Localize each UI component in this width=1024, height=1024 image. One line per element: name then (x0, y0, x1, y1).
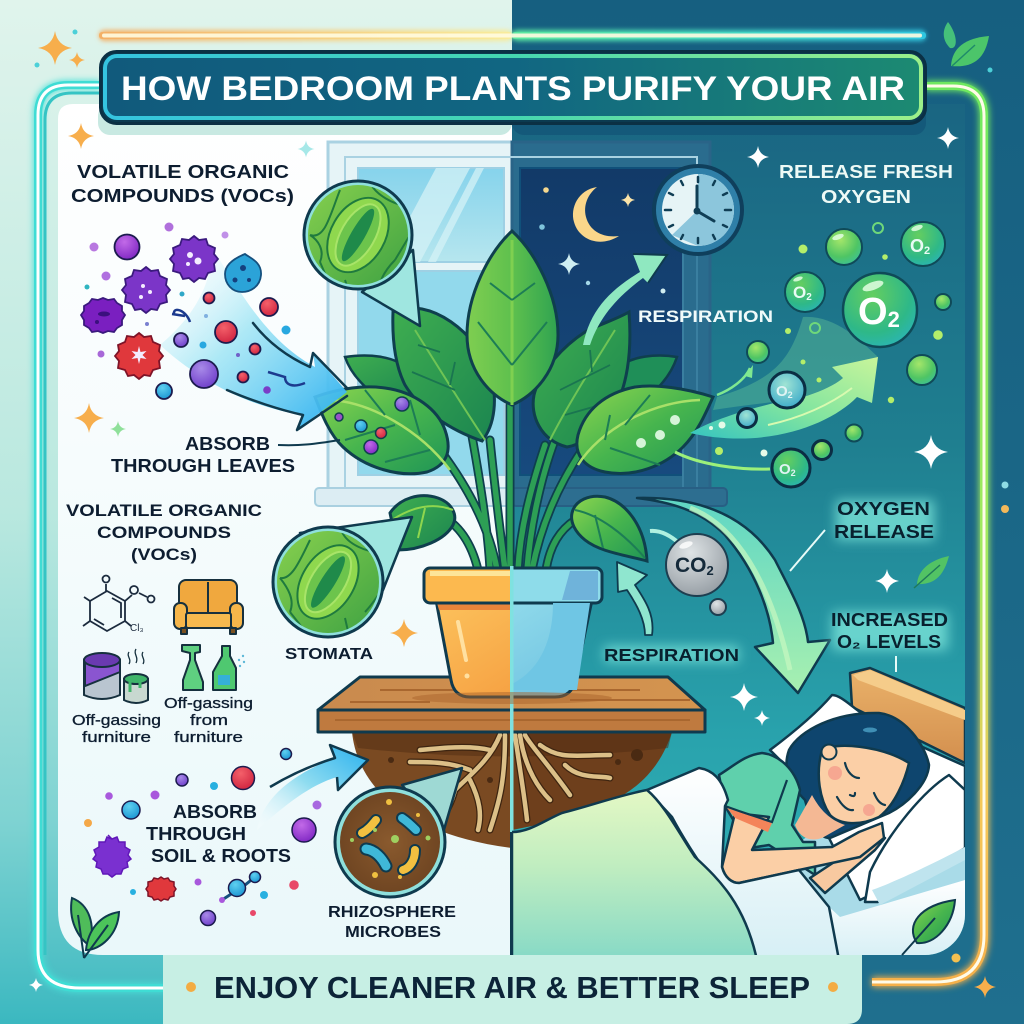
label: oxygen release: RELEASE (834, 522, 934, 542)
window frame: night (512, 142, 710, 490)
label: stomata: STOMATA (285, 646, 374, 663)
O2 bubbles: O (793, 283, 806, 302)
label: off-gassing from furniture right (164, 696, 253, 746)
sparkles near bed (730, 683, 770, 726)
icon: leaf bottom right (902, 900, 955, 955)
table front (318, 710, 705, 732)
pot: day half (422, 566, 510, 698)
arrow to clock (583, 254, 667, 345)
icon: cleaning bottles (182, 645, 245, 690)
panel: day side (58, 104, 512, 955)
O2 bubbles (715, 222, 951, 487)
icon: leaf near increased levels (914, 556, 949, 588)
face (795, 728, 909, 839)
inner frame (345, 157, 697, 488)
label: off-gassing from furniture right: Off-gassing (164, 696, 253, 712)
icon: leaves bottom left (71, 898, 119, 958)
label: off-gassing from furniture right: from (190, 713, 228, 729)
VOC blob: purple (170, 236, 218, 282)
panel: night side (512, 104, 965, 955)
back leaf left (345, 356, 426, 400)
hair back (786, 713, 929, 838)
label: absorb through leaves: THROUGH LEAVES (111, 456, 295, 476)
label: rhizosphere microbes: RHIZOSPHERE (328, 904, 456, 921)
window sill (315, 488, 727, 506)
label: release fresh oxygen: RELEASE FRESH (779, 162, 953, 182)
lower VOC particles (84, 748, 322, 926)
soil ball (352, 732, 672, 848)
icon: sofa (174, 580, 243, 634)
O2 rising arrow (675, 317, 878, 469)
CO2 bubble (666, 534, 728, 596)
icon: clock (652, 164, 744, 256)
heading: VOCs upper: COMPOUNDS (VOCs) (71, 186, 294, 206)
VOC blob: red (115, 333, 163, 379)
label: off-gassing from furniture right: furniture (174, 730, 243, 746)
large O2 bubble (843, 273, 917, 347)
big curved arrow down to sleeper (637, 498, 830, 693)
lower right leaf (572, 496, 647, 561)
icon: crescent moon (573, 187, 619, 242)
heading: VOCs upper: VOLATILE ORGANIC (77, 162, 289, 182)
label: increased O2 levels (831, 610, 948, 652)
green blanket (512, 790, 757, 960)
icon: leaves top right (944, 22, 989, 66)
stomata callout top (300, 180, 420, 326)
center divider line (510, 566, 514, 834)
divider under table (510, 832, 513, 955)
pot (424, 568, 602, 697)
upper right leaf (533, 312, 630, 447)
table pot shadow (412, 692, 612, 704)
stems (440, 405, 582, 570)
labels: night side text (604, 162, 953, 665)
icon: chemical molecule (83, 576, 154, 634)
label: off-gassing furniture left (72, 713, 161, 746)
O2 bubbles: 2 (888, 307, 900, 332)
pillow front (865, 775, 965, 902)
label: increased O2 levels: O₂ LEVELS (837, 632, 941, 652)
pillow back (770, 695, 965, 900)
microbes callout (335, 768, 462, 897)
headboard (850, 668, 965, 763)
O2 bubbles: 2 (791, 468, 796, 478)
label: oxygen release: OXYGEN (837, 499, 930, 519)
label: absorb through leaves (111, 434, 295, 476)
VOC blob: lower red (146, 877, 176, 901)
label: absorb through soil and roots: ABSORB (173, 801, 257, 822)
label: release fresh oxygen: OXYGEN (821, 187, 911, 207)
small respiration arrow and CO2 (617, 531, 728, 635)
frame right detail (683, 240, 697, 488)
back leaf right (600, 356, 677, 400)
moon and night sky (539, 187, 666, 294)
label: respiration dark: RESPIRATION (604, 645, 739, 665)
VOC blob: dark purple (81, 298, 125, 333)
small respiration arrow and CO2: CO (675, 554, 706, 577)
respiration arrow (617, 562, 653, 635)
window frame: day (328, 142, 512, 490)
O2 bubbles: O (779, 461, 791, 478)
label: absorb through soil and roots: SOIL & ROOTS (151, 845, 291, 866)
pot: night half (514, 566, 604, 698)
title: HOW BEDROOM PLANTS PURIFY YOUR AIR (121, 70, 905, 108)
O2 bubbles: O (776, 383, 788, 400)
title shadow band (98, 104, 926, 135)
lower blue arrow to soil (257, 745, 368, 830)
label: release fresh oxygen (779, 162, 953, 207)
O2 bubbles: O (858, 291, 888, 333)
heading: VOCs lower: COMPOUNDS (97, 523, 231, 542)
VOC droplet: blue (225, 254, 261, 292)
top neon bar (99, 30, 926, 41)
glass: day pane (358, 168, 504, 475)
icon: paint cans (84, 649, 148, 703)
heading: VOCs lower (66, 501, 262, 564)
heading: VOCs lower: (VOCs) (131, 545, 197, 564)
glass: night pane (520, 168, 683, 475)
white sheet fold (647, 768, 839, 960)
O2 bubbles: O (910, 236, 924, 256)
O2 bubbles: 2 (788, 390, 793, 400)
roots (410, 735, 610, 830)
stomata callout lower (270, 517, 412, 640)
upper left leaf (393, 308, 494, 441)
big blue arrow to leaf (160, 250, 347, 430)
O2 bubbles: 2 (806, 292, 812, 303)
table top (318, 677, 705, 710)
plant (315, 231, 713, 570)
label glows (604, 500, 948, 662)
leader lines (278, 440, 896, 672)
bottom banner (163, 955, 862, 1024)
label: increased O2 levels: INCREASED (831, 610, 948, 630)
front left leaf (315, 387, 450, 474)
labels: day side text (66, 162, 456, 941)
table (318, 677, 705, 732)
VOC blob: lower purple (93, 835, 131, 877)
icon: chemical molecule: Cl₃ (130, 623, 144, 634)
VOC blob: violet (122, 267, 170, 313)
label: off-gassing furniture left: furniture (82, 730, 151, 746)
label: rhizosphere microbes: MICROBES (345, 924, 441, 941)
label: oxygen release (834, 499, 934, 542)
label: respiration white: RESPIRATION (638, 307, 773, 326)
window (315, 142, 727, 506)
label: absorb through soil and roots: THROUGH (146, 823, 246, 844)
label: absorb through soil and roots (146, 801, 291, 866)
label: rhizosphere microbes (328, 904, 456, 941)
bed and sleeping person (512, 668, 965, 960)
VOC particles (81, 222, 305, 399)
center leaf (467, 231, 558, 405)
heading: VOCs lower: VOLATILE ORGANIC (66, 501, 262, 520)
mattress (801, 838, 965, 955)
front right leaf (577, 386, 713, 473)
small respiration arrow and CO2: 2 (706, 563, 714, 578)
label: absorb through leaves: ABSORB (185, 434, 270, 454)
heading: VOCs upper (71, 162, 294, 206)
lower left leaf (390, 496, 455, 550)
pollutant dots on leaf (335, 397, 409, 454)
O2 bubbles: 2 (924, 245, 930, 257)
molecule icon (222, 872, 260, 900)
shirt (719, 753, 815, 875)
title banner (100, 52, 926, 124)
label: off-gassing furniture left: Off-gassing (72, 713, 161, 729)
bottom tagline: ENJOY CLEANER AIR & BETTER SLEEP (214, 970, 810, 1005)
arms (722, 780, 885, 893)
